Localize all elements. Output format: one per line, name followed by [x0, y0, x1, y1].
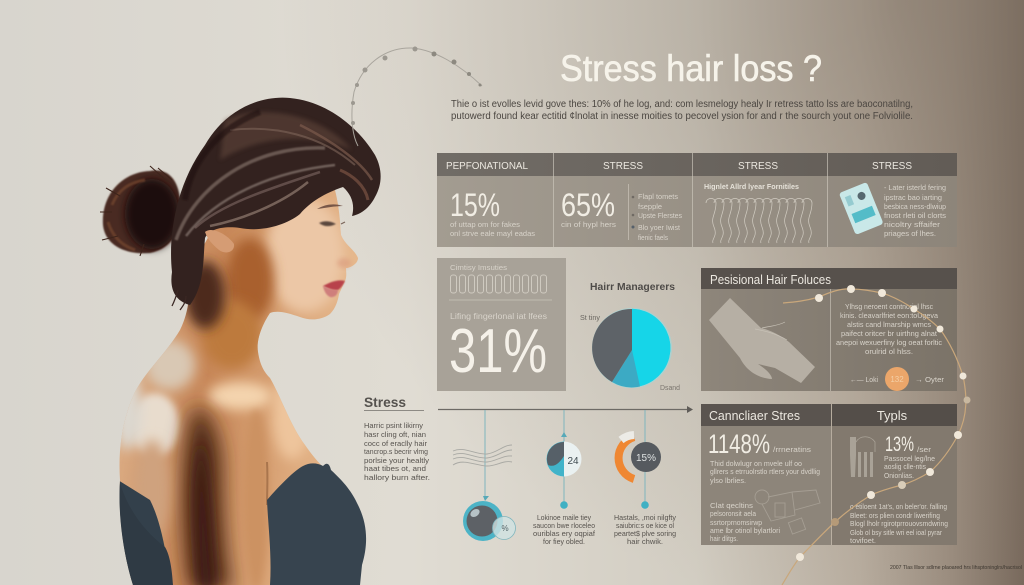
column: hair strands: Hignlet Allrd lyear Fornitiles	[704, 182, 799, 191]
chart: hair managers pie: Hairr Managerers	[590, 282, 675, 293]
panel: bottom right: Bleet: ors plien condr liwerifing	[850, 511, 940, 520]
icon: hand	[709, 298, 815, 383]
column: 65%: Upste Flerstes	[638, 211, 682, 220]
panel: bottom left: ame lbr otinol bylartlori	[710, 526, 780, 535]
chart: hair managers pie: St tiny	[580, 313, 600, 322]
title: Stress hair loss ?	[560, 48, 822, 89]
skin and shading	[114, 180, 358, 585]
chart: hair managers pie	[580, 282, 680, 392]
section: stress text	[364, 394, 430, 482]
panel: bottom left: 1148%	[708, 429, 770, 459]
column: hair strands	[704, 161, 812, 243]
column: 65%: fsepple	[638, 202, 662, 211]
panel: personal hair focus	[701, 268, 957, 391]
arrow: timeline	[438, 406, 693, 413]
column: 15%: 15%	[450, 187, 500, 223]
column: hair strands: STRESS	[738, 161, 778, 172]
marker dot	[641, 501, 649, 509]
panel: personal hair focus: kinis. cleavarlfriet eon:toUgeva	[840, 311, 939, 320]
panel: bottom right: aoslig clle-ntis	[884, 462, 926, 471]
column: 15%: of uttap om for fakes	[450, 220, 520, 229]
timeline item: 24 pie: Lokinoe maile tiey	[537, 513, 591, 522]
marker dot	[560, 501, 568, 509]
column: card: priages of lhes.	[884, 229, 936, 238]
panel: bottom left: ssrtorprnomsirwp	[710, 518, 762, 527]
panel: bottom left: Clat qecltins	[710, 501, 753, 510]
column: 65%: fienic faels	[638, 233, 668, 242]
icon: half pie: 24	[567, 456, 579, 467]
column: 65%: 65%	[561, 187, 615, 223]
panel: bottom right: 13%	[885, 433, 914, 456]
timeline item: 24 pie: for fiey obled.	[543, 537, 585, 546]
decorative gold bead string	[782, 285, 970, 585]
timeline item: 15% ring: hair chwik.	[627, 537, 663, 546]
control: orange dial	[850, 367, 945, 391]
section: stress text: Stress	[364, 394, 406, 410]
panel: bottom right: o etiloent 1at's, on beler'or. falling	[850, 502, 947, 511]
dress	[120, 463, 366, 585]
icon: orange ring: 15%	[636, 453, 656, 464]
icon: row of capsules	[450, 275, 546, 293]
timeline item: 15% ring: Hastals, ,moi nilgfty	[614, 513, 676, 522]
panel: personal hair focus: anepoi wexuerfiny log oeat forltic	[836, 338, 942, 347]
hair	[171, 98, 381, 310]
panel: personal hair focus: Pesisional Hair Foluces	[710, 272, 831, 287]
panel: bottom left: gllrers s etrruolrstlo rtlers your dvdllig	[710, 467, 820, 476]
icon: sketch	[755, 490, 820, 534]
control: orange dial: ←— Loki	[850, 375, 878, 384]
illustration: woman in profile	[100, 98, 381, 585]
panel: bottom right: tovifoet.	[850, 536, 876, 545]
section: stress text: cocc of eraclly hair	[364, 439, 428, 448]
hair bun	[100, 166, 180, 256]
control: orange dial: 132	[890, 375, 904, 384]
panel: bottom right	[832, 404, 957, 545]
column: 65%: Flapl tomets	[638, 192, 678, 201]
control: orange dial: → Oyter	[915, 375, 945, 384]
column: 65%	[561, 161, 682, 242]
column: 15%	[446, 161, 535, 238]
column: card	[839, 161, 946, 238]
panel: bottom left: /rrneratins	[773, 445, 811, 454]
panel: personal hair focus: orulrid ol hlss.	[865, 347, 913, 356]
column: 15%: onl strve eale mayl eadas	[450, 229, 535, 238]
timeline item: 15% ring: saiubric:s oe kice ol	[616, 521, 674, 530]
section: stress text: porlsie your healtly	[364, 456, 429, 465]
column: 65%: cin of hypl hers	[561, 220, 616, 229]
panel: bottom right: Blogl lholr rgirotprrouovsmdwring	[850, 519, 948, 528]
column: card: - Later isterld fering	[884, 183, 946, 192]
face features	[317, 204, 351, 297]
intro text	[451, 99, 913, 122]
panel: bottom left: ylso lbrlies.	[710, 476, 746, 485]
column: 65%: STRESS	[603, 161, 643, 172]
panel: 31% stat: 31%	[449, 317, 547, 386]
panel: bottom right: Typls	[877, 408, 908, 423]
decorative bead arc	[351, 46, 482, 146]
section: stress text: hallory burn after.	[364, 473, 430, 482]
section: stress text: haat tibes ot, and	[364, 464, 426, 473]
section: stress text: tancrop.s becrir vlmg	[364, 447, 428, 456]
panel: bottom left: hair dlitgs.	[710, 534, 738, 543]
intro text: putowerd found kear ectitid ¢lnolat in inesse moities to pecovel ysion for and r the sourch yout one Folviolile.	[451, 111, 913, 122]
chart: hair managers pie: Dsand	[660, 383, 680, 392]
column: card: besbica ness-dlwiup	[884, 202, 946, 211]
timeline item: 24 pie	[533, 410, 596, 546]
panel: 31% stat: Cimtisy Imsuties	[450, 263, 507, 272]
column: 15%: PEPFONATIONAL	[446, 161, 528, 172]
icon: card	[839, 182, 884, 235]
panel: personal hair focus: Ylhsg neroent contnorial lhsc	[845, 302, 933, 311]
column: card: STRESS	[872, 161, 912, 172]
timeline item: waves and bubble	[453, 410, 516, 541]
panel: personal hair focus: alstis cand lmarship wmcs	[847, 320, 931, 329]
panel: bottom right: Passocel leg/lne	[884, 454, 935, 463]
icon: wavy lines	[453, 445, 512, 466]
ear	[205, 230, 234, 252]
column: card: fnost rleti oil clorts	[884, 211, 946, 220]
timeline item: 24 pie: saucon bwe rloceleo	[533, 521, 595, 530]
panel: 31% stat: Lifing fingerlonal iat lfees	[450, 312, 547, 321]
panel: bottom right: Onionlias.	[884, 471, 914, 480]
panel: bottom right: /ser	[917, 445, 932, 454]
column: 65%: Blo yoer Iwist	[638, 223, 681, 232]
icon: bubble: %	[501, 524, 509, 533]
icon: hair strands	[706, 198, 812, 243]
intro text: Thie o ist evolles levid gove thes: 10% of he log, and: com lesmelogy healy Ir retress tatto lss are baoconatilng,	[451, 99, 913, 110]
column: card: nicoltry sffaifer	[884, 220, 941, 229]
panel: bottom left: pelsoronsit aela	[710, 509, 757, 518]
icon: brushes	[850, 437, 875, 477]
column: card: ipstrac bao iarting	[884, 193, 942, 202]
panel: bottom left: Thid dolwlugr on mvele ulf oo	[710, 459, 802, 468]
panel: 31% stat	[437, 258, 566, 391]
panel: bottom left: Canncliaer Stres	[709, 408, 800, 423]
panel: personal hair focus: paifect oritcer br uirthng alnat	[841, 329, 938, 338]
panel: bottom right: Glob ol bsy sitle wri eel ioal pyrar	[850, 528, 942, 537]
timeline item: 15% ring	[614, 410, 676, 546]
timeline item: 24 pie: ouriblas ery oqpiaf	[533, 529, 596, 538]
timeline item: 15% ring: peartet$ plve soring	[614, 529, 676, 538]
section: stress text: Harric psint likirny	[364, 421, 423, 430]
section: stress text: hasr cling oft, nian	[364, 430, 426, 439]
panel: bottom left	[701, 404, 831, 545]
panel: top stats table	[437, 153, 957, 247]
